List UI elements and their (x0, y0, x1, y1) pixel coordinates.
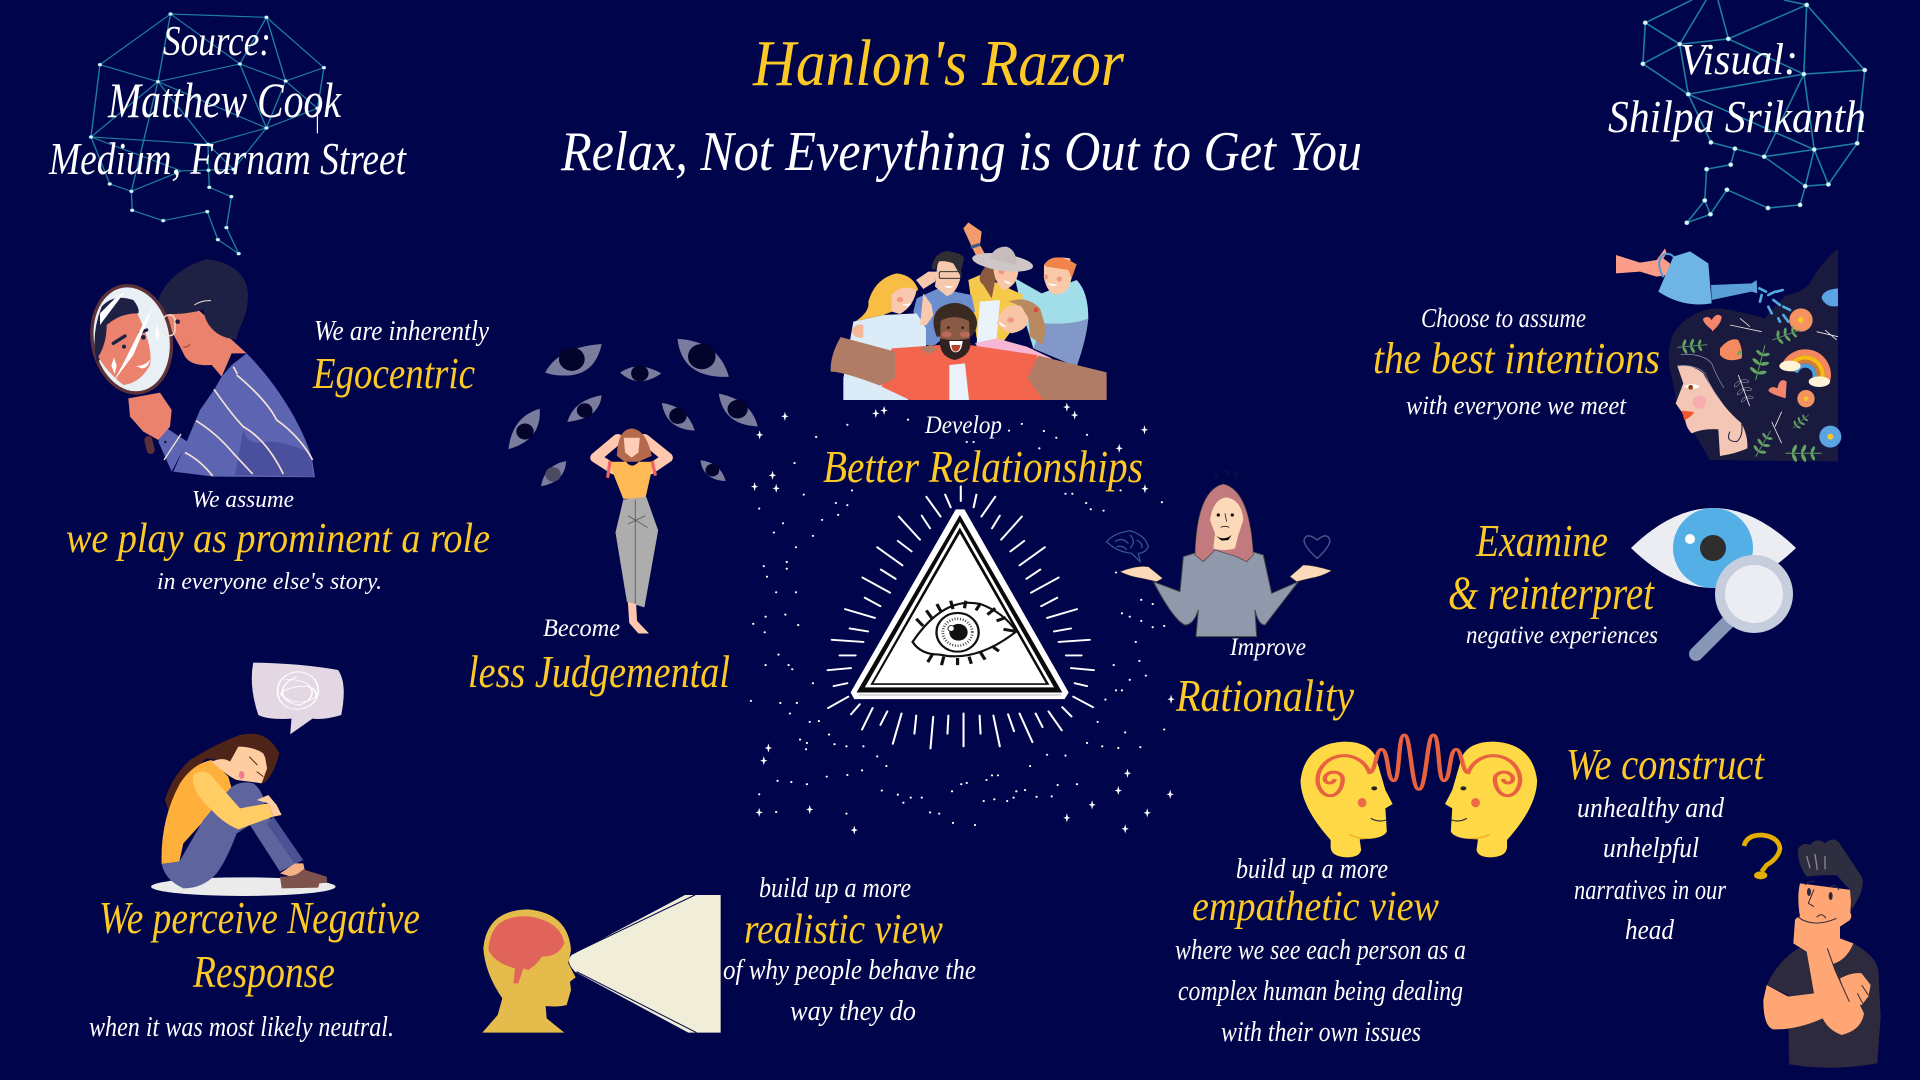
text: negative response: when it was most likely neutral. (89, 1012, 394, 1043)
text: better relationships (823, 412, 1143, 492)
text: empathetic view (1175, 854, 1466, 1048)
visual credit: Visual: (1680, 35, 1798, 84)
text: less judgemental: less Judgemental (468, 646, 730, 697)
starfield around triangle (751, 402, 1175, 835)
source credit (48, 19, 407, 184)
illustration: two heads with connected waves (1301, 735, 1537, 857)
illustration: woman weighing brain and heart (1107, 471, 1332, 637)
source credit: Source: (163, 19, 271, 65)
title: Hanlon's Razor (752, 27, 1124, 100)
icon: brain (1107, 531, 1148, 562)
text: realistic view: way they do (790, 996, 916, 1027)
text: less judgemental: Become (543, 615, 620, 642)
text: prominent role: we play as prominent a role (66, 516, 490, 562)
illustration: group of friends selfie (831, 222, 1107, 400)
text: realistic view (723, 873, 976, 1027)
text: egocentric: We are inherently (314, 316, 490, 347)
text: negative response (89, 892, 420, 1043)
text: we construct: head (1625, 915, 1675, 946)
text: we construct: unhelpful (1603, 833, 1699, 864)
visual credit: Shilpa Srikanth (1608, 91, 1866, 142)
sitting woman (151, 734, 336, 896)
illustration: floating eyes and stressed woman (508, 339, 758, 634)
illustration: thinking man with question mark (1744, 835, 1881, 1068)
text: examine and reinterpret: Examine (1475, 515, 1608, 566)
text: best intentions: with everyone we meet (1406, 391, 1627, 420)
icon: eye with magnifying glass (1631, 508, 1796, 654)
constellation: top left (89, 12, 326, 255)
illustration: head with brain and beam of light (482, 895, 721, 1033)
text: empathetic view: build up a more (1236, 854, 1388, 885)
text: examine and reinterpret (1448, 515, 1658, 649)
text: we construct: narratives in our (1574, 875, 1726, 906)
text: negative response: Response (192, 946, 335, 997)
text: empathetic view: empathetic view (1192, 884, 1439, 930)
text: empathetic view: where we see each person as a (1175, 935, 1466, 966)
icon: heart (1304, 536, 1330, 558)
text: examine and reinterpret: & reinterpret (1448, 567, 1655, 620)
text: improve rationality: Improve (1229, 634, 1306, 661)
text: less judgemental (468, 615, 730, 697)
text: we construct (1566, 740, 1766, 946)
title: Relax, Not Everything is Out to Get You (560, 121, 1362, 183)
text: prominent role (66, 487, 490, 595)
text: better relationships: Develop (924, 412, 1002, 439)
text: improve rationality (1175, 634, 1355, 721)
text: prominent role: We assume (192, 487, 294, 513)
text: prominent role: in everyone else's story. (157, 569, 382, 595)
text: we construct: unhealthy and (1577, 793, 1725, 824)
illustration: man looking in mirror (84, 259, 315, 477)
text: negative response: We perceive Negative (99, 892, 420, 943)
source credit: Matthew Cook (107, 72, 342, 128)
text: realistic view: realistic view (744, 907, 943, 953)
text: best intentions: the best intentions (1373, 334, 1660, 383)
text: empathetic view: with their own issues (1221, 1017, 1421, 1048)
title (560, 27, 1362, 183)
text: realistic view: build up a more (759, 873, 911, 904)
text: realistic view: of why people behave the (723, 955, 976, 986)
hand and watering can (1616, 248, 1790, 322)
text: egocentric (312, 316, 490, 398)
illustration: watering can and floral-haired woman (1616, 248, 1841, 462)
text: we construct: We construct (1566, 740, 1766, 789)
text: best intentions (1373, 303, 1660, 420)
thought bubble (252, 663, 344, 734)
visual credit (1608, 35, 1866, 142)
icon: question mark (1744, 835, 1780, 879)
text: egocentric: Egocentric (312, 349, 475, 398)
text: best intentions: Choose to assume (1421, 303, 1586, 333)
text: empathetic view: complex human being dealing (1178, 976, 1463, 1007)
text: improve rationality: Rationality (1175, 670, 1355, 721)
icon: all-seeing eye triangle with rays (828, 486, 1094, 748)
text: better relationships: Better Relationships (823, 441, 1143, 492)
constellation: top right (1641, 0, 1867, 225)
illustration: sad woman with thought bubble (151, 663, 344, 896)
source credit: Medium, Farnam Street (48, 133, 407, 184)
text: examine and reinterpret: negative experiences (1466, 622, 1658, 649)
